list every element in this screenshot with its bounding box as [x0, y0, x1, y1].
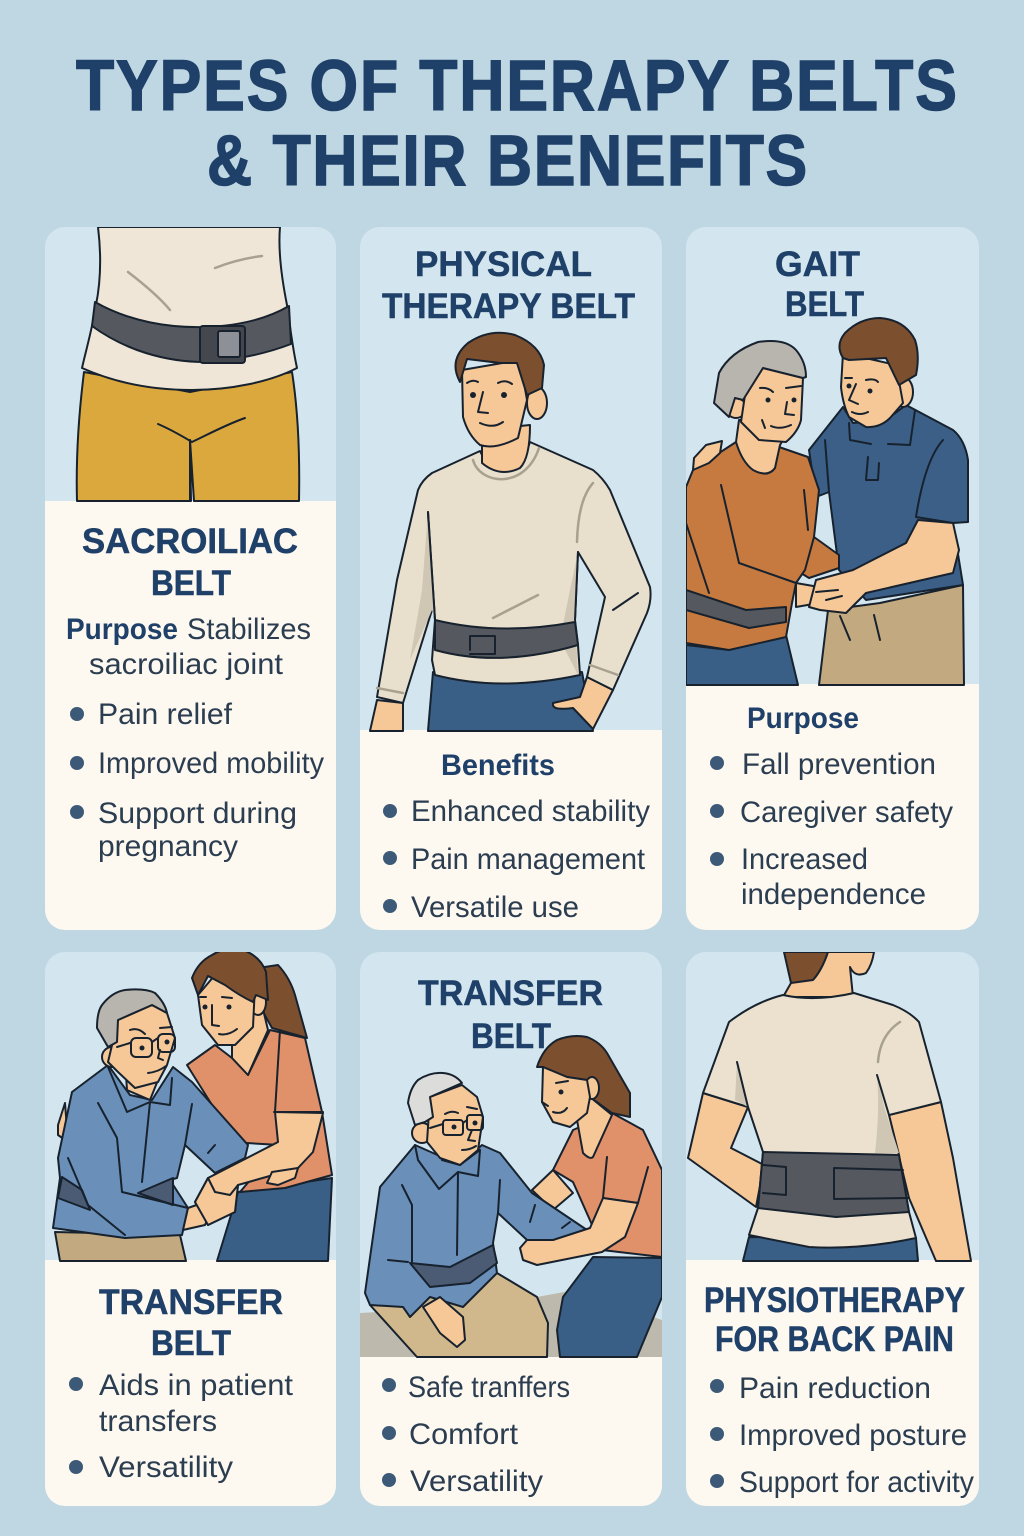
list: transfer belt benefits [382, 1371, 570, 1498]
heading: physiotherapy for back pain [706, 1287, 965, 1352]
illustration: caregiver helping seated older man [360, 1036, 662, 1357]
heading: transfer belt [99, 1289, 283, 1356]
panel: sacroiliac belt [45, 227, 336, 930]
list: physical therapy benefits [383, 795, 650, 924]
list: back pain benefits: Improved posture [739, 1419, 967, 1452]
panel: transfer belt with seated patient [360, 952, 662, 1506]
list: sacroiliac benefits: pregnancy [98, 830, 238, 863]
panel: transfer belt with standing patient [45, 949, 336, 1506]
list: back pain benefits: Support for activity [739, 1466, 974, 1499]
heading: benefits: Benefits [441, 749, 555, 782]
heading: transfer belt: BELT [151, 1324, 231, 1363]
illustration: back view with lumbar belt [688, 952, 971, 1261]
list: transfer belt benefits: Comfort [409, 1418, 519, 1451]
heading: transfer belt: BELT [471, 1017, 551, 1056]
heading: sacroiliac belt [82, 528, 298, 596]
heading: physical therapy belt [382, 251, 635, 318]
list: transfer belt benefits: Versatility [410, 1465, 543, 1498]
illustration: caregiver helping older man stand [53, 949, 332, 1261]
list: physical therapy benefits: Pain management [411, 843, 646, 876]
heading: gait belt: GAIT [775, 245, 860, 284]
title: TYPES OF THERAPY BELTS [76, 46, 957, 126]
list: gait belt benefits [710, 748, 953, 911]
text: purpose [66, 613, 311, 681]
list: transfer belt benefits: Aids in patient [99, 1369, 294, 1402]
heading: physical therapy belt: PHYSICAL [415, 245, 592, 284]
list: back pain benefits: Pain reduction [739, 1372, 931, 1405]
heading: transfer belt [418, 980, 603, 1048]
text: purpose: Stabilizes [187, 613, 311, 646]
list: transfer belt benefits: Safe tranffers [408, 1371, 570, 1404]
title [76, 46, 957, 201]
list: sacroiliac benefits: Support during [98, 797, 297, 830]
text: purpose: sacroiliac joint [89, 648, 284, 681]
list: gait belt benefits: Caregiver safety [740, 796, 953, 829]
illustration: man wearing belt [370, 333, 651, 731]
heading: sacroiliac belt: SACROILIAC [82, 522, 298, 561]
list: transfer belt benefits [69, 1369, 294, 1484]
panel: gait belt [686, 227, 979, 930]
illustration: waist with sacroiliac belt [77, 227, 299, 501]
heading: gait belt: BELT [785, 285, 864, 324]
heading: physiotherapy for back pain: FOR BACK PAIN [715, 1320, 954, 1359]
list: sacroiliac benefits: Improved mobility [98, 747, 324, 780]
heading: physical therapy belt: THERAPY BELT [382, 287, 635, 326]
list: transfer belt benefits: Versatility [99, 1451, 233, 1484]
heading: physiotherapy for back pain: PHYSIOTHERAPY [704, 1281, 965, 1320]
title: & THEIR BENEFITS [207, 121, 807, 201]
heading: transfer belt: TRANSFER [99, 1283, 283, 1322]
list: physical therapy benefits: Enhanced stability [411, 795, 650, 828]
list: gait belt benefits: independence [741, 878, 926, 911]
panel: physiotherapy for back pain [686, 952, 979, 1506]
heading: sacroiliac belt: BELT [151, 564, 231, 603]
heading: gait belt [776, 251, 864, 316]
illustration: caregiver supporting older woman [686, 318, 968, 685]
list: sacroiliac benefits: Pain relief [98, 698, 233, 731]
text: purpose: Purpose [66, 613, 178, 646]
list: back pain benefits [710, 1372, 974, 1499]
list: sacroiliac benefits [70, 698, 324, 863]
panel: physical therapy belt [360, 227, 662, 930]
heading: purpose: Purpose [747, 702, 859, 735]
heading: transfer belt: TRANSFER [418, 974, 603, 1013]
list: gait belt benefits: Fall prevention [742, 748, 936, 781]
list: gait belt benefits: Increased [741, 843, 868, 876]
list: physical therapy benefits: Versatile use [411, 891, 579, 924]
list: transfer belt benefits: transfers [99, 1405, 217, 1438]
